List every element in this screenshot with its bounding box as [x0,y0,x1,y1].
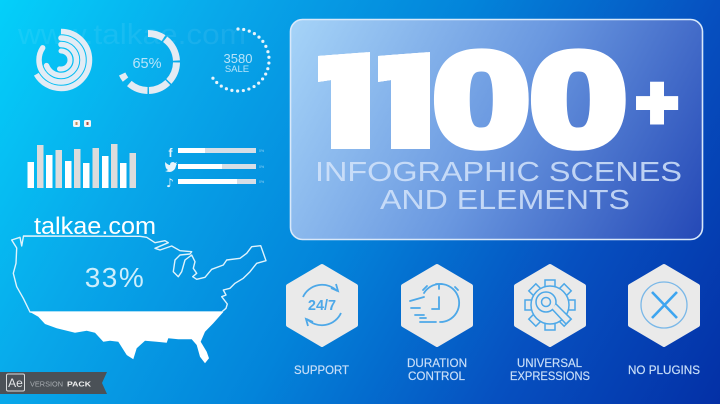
label: 65%: 65% [132,56,162,72]
map outline [12,236,266,312]
heading: 1100+: 0 [433,25,530,173]
watermark: talkae.com: talkae.com [34,213,156,240]
heading: 1100+: 1 [280,22,378,173]
labels: features: SUPPORT [294,365,349,377]
labels: features: NO PLUGINS [628,365,700,377]
heading: 1100+ [318,48,678,151]
social bars [165,146,264,190]
heading: 1100+: 1 [340,22,438,173]
watermark: www.talkae.com: www.talkae.com [17,19,246,51]
icon: tiktok: ♪ [166,176,174,190]
heading: 1100+: 1 [295,22,393,173]
tiny percent labels: 0% [259,180,264,184]
icon: facebook: f [168,146,174,160]
subheading: and elements: AND ELEMENTS [380,184,630,215]
labels: features: EXPRESSIONS [510,371,590,383]
labels: features: DURATION [407,358,467,370]
chart: dotted ring 3580 sale [211,29,269,91]
hexagon: no plugins [630,266,698,345]
hexagon: duration control [403,266,471,345]
icon: stopwatch [410,284,459,322]
icon: Ae [6,374,24,391]
tiny percent labels: 0% [259,165,264,169]
hexagon: support [288,266,356,345]
label: pack: PACK [67,380,92,388]
label: version: VERSION [30,382,63,388]
badge: Ae version pack: Ae [8,376,23,390]
heading: 1100+: 0 [530,25,627,173]
labels: features [294,358,700,383]
icon: gear and wrench [525,280,575,330]
legend chips [73,120,91,127]
labels: features: CONTROL [408,371,466,383]
hexagon: universal expressions [516,266,584,345]
badge: Ae version pack [0,372,107,394]
heading: 1100+: + [636,63,678,143]
icon: twitter [165,162,177,172]
icon: crossed circle [641,282,687,328]
icon: 24/7: 24/7 [308,298,336,314]
subheading: infographic scenes: INFOGRAPHIC SCENES [315,156,682,187]
chart: 65% segmented donut [120,34,176,90]
map: usa [12,236,266,363]
panel: 1100+ headline [280,20,702,240]
tiny percent labels [259,149,264,184]
map fill: 33 percent [30,312,223,363]
label: 3580: 3580 [224,51,252,66]
chart: radial rings [32,32,90,88]
labels: features: UNIVERSAL [517,358,583,370]
label: sale: SALE [225,64,249,75]
heading: 1100+: 1 [355,22,453,173]
tiny percent labels: 0% [259,149,264,153]
label: 33%: 33% [85,262,145,293]
bar chart [28,144,136,188]
